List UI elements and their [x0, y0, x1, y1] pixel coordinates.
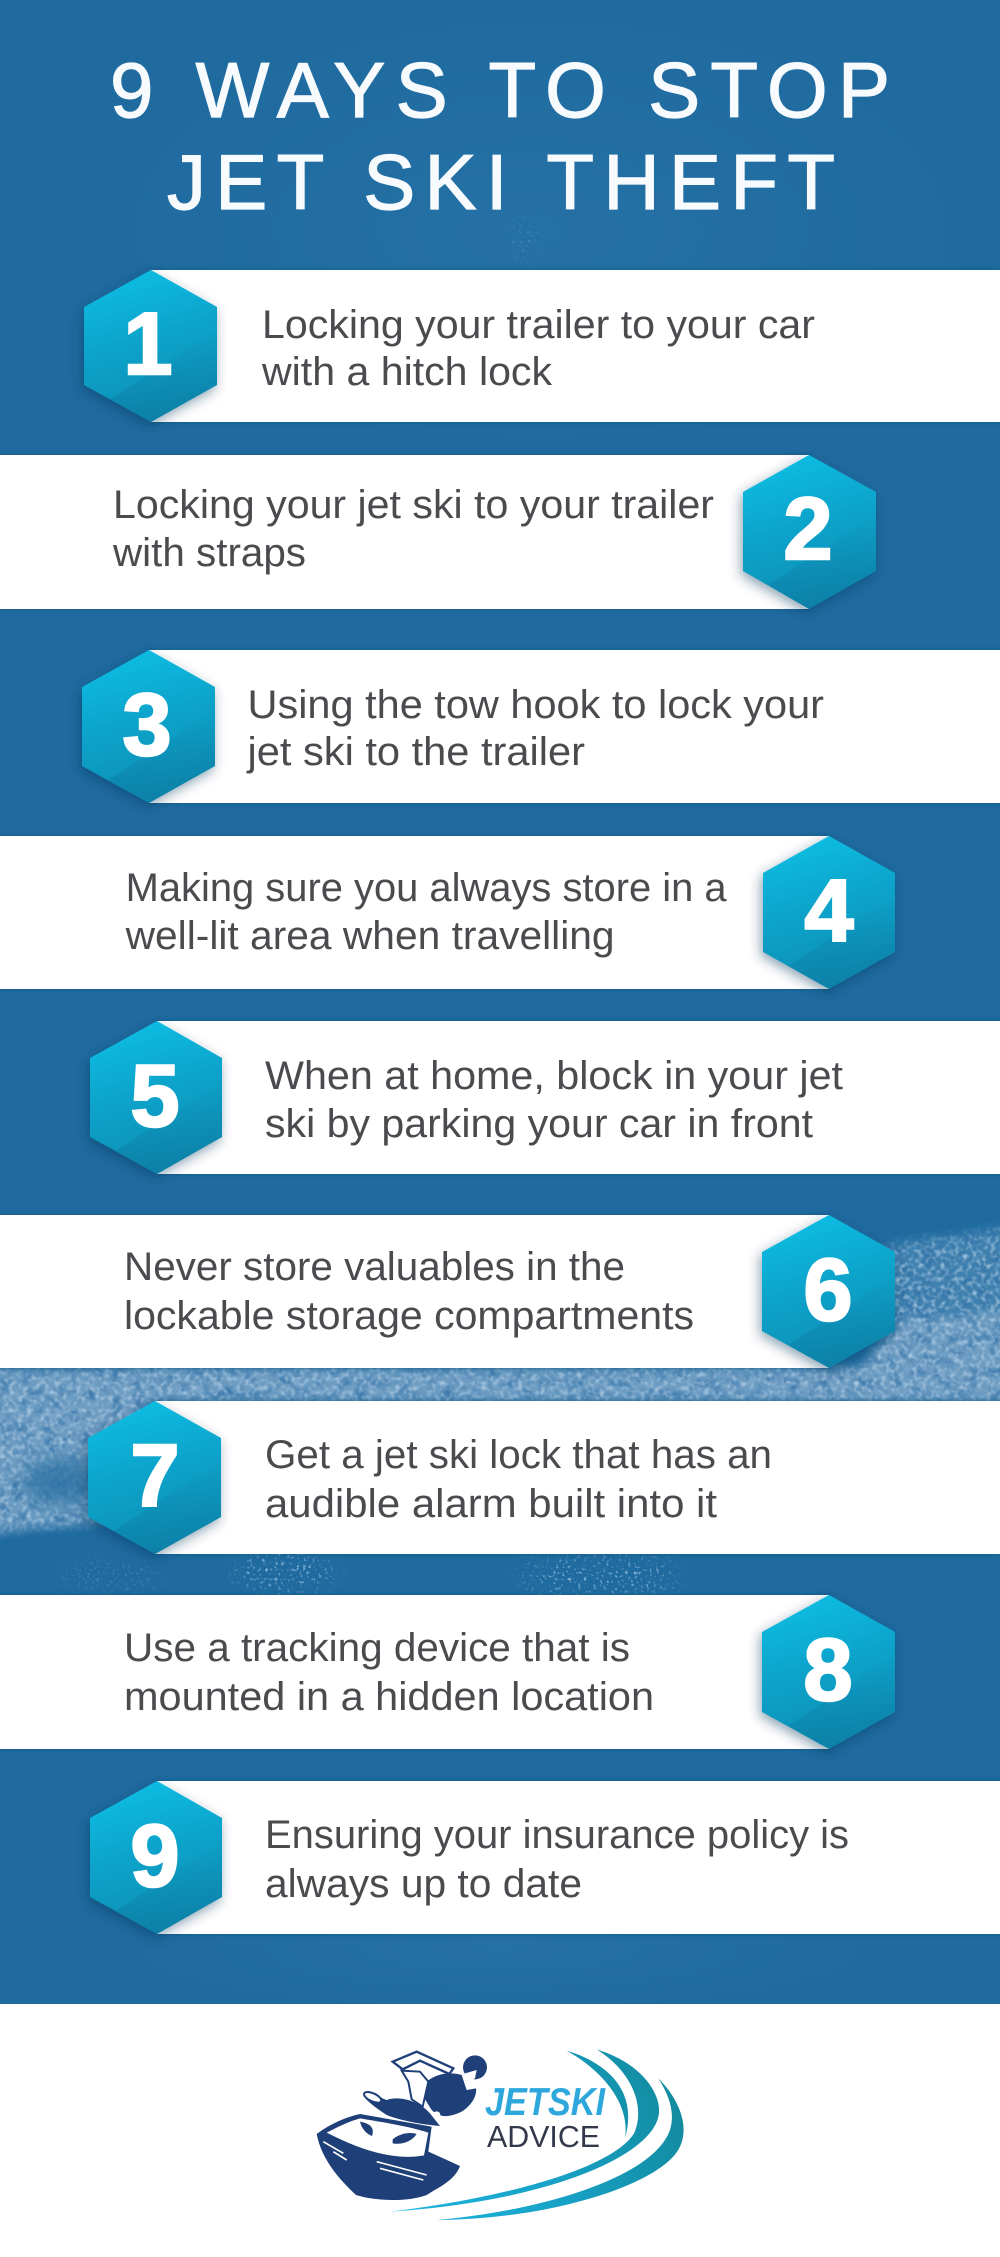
number 6: 6 [804, 1240, 852, 1339]
logo: Jetski Advice [317, 2049, 684, 2220]
text 3 [246, 683, 824, 774]
number 7: 7 [131, 1426, 179, 1525]
step 3 [82, 650, 1000, 803]
text 2: Locking your jet ski to your trailer [113, 483, 714, 527]
number 8: 8 [804, 1620, 852, 1719]
logo wordmark: JETSKI: JETSKI [485, 2081, 606, 2124]
number 4: 4 [805, 861, 854, 960]
text 2: with straps [112, 531, 306, 575]
spray droplets [60, 218, 680, 1594]
band 4 [0, 836, 829, 989]
band 3 [149, 650, 1000, 803]
text 6: Never store valuables in the [124, 1245, 625, 1289]
text 7 [265, 1433, 772, 1526]
text 1: Locking your trailer to your car [262, 303, 815, 347]
text 8 [124, 1626, 654, 1719]
hexagon badge 7 [88, 1401, 221, 1554]
text 3: Using the tow hook to lock your [248, 683, 824, 727]
hexagon badge 3 [82, 650, 215, 803]
text 1: with a hitch lock [261, 350, 553, 394]
text 7: audible alarm built into it [265, 1482, 717, 1526]
band 8 [0, 1595, 829, 1749]
text 2 [112, 483, 714, 575]
number 5: 5 [131, 1046, 179, 1145]
step 8 [0, 1595, 895, 1749]
step 9 [90, 1781, 1000, 1934]
step 1 [84, 270, 1000, 422]
number 1: 1 [124, 294, 172, 393]
number 9: 9 [131, 1806, 179, 1905]
hexagon badge 1 [84, 270, 217, 422]
step 4 [0, 836, 895, 989]
text 7: Get a jet ski lock that has an [265, 1433, 772, 1477]
text 4 [125, 866, 727, 958]
text 8: mounted in a hidden location [124, 1675, 654, 1719]
hexagon badge 8 [762, 1595, 895, 1749]
text 9: always up to date [265, 1862, 582, 1906]
hexagon badge 4 [763, 836, 895, 989]
footer white area [0, 2004, 1000, 2257]
title: JET SKI THEFT [167, 138, 835, 226]
text 3: jet ski to the trailer [246, 730, 585, 774]
band 9 [157, 1781, 1000, 1934]
band 1 [151, 270, 1000, 422]
step 5 [90, 1021, 1000, 1174]
band 7 [155, 1401, 1000, 1554]
logo swooshes [390, 2049, 684, 2220]
step 7 [88, 1401, 1000, 1554]
hexagon badge 6 [762, 1215, 895, 1368]
title: 9 WAYS TO STOP [110, 46, 890, 134]
text 9: Ensuring your insurance policy is [265, 1813, 849, 1857]
title [110, 46, 890, 226]
text 4: Making sure you always store in a [126, 866, 727, 910]
text 1 [261, 303, 815, 394]
step 2 [0, 455, 876, 609]
hexagon badge 5 [90, 1021, 222, 1174]
text 6: lockable storage compartments [124, 1294, 694, 1338]
text 5: When at home, block in your jet [265, 1054, 843, 1098]
band 6 [0, 1215, 829, 1368]
step 6 [0, 1215, 895, 1368]
logo wordmark: ADVICE: ADVICE [487, 2119, 600, 2154]
text 9 [265, 1813, 849, 1906]
sea foam from jet ski wake [0, 1225, 1000, 1534]
hexagon badge 9 [90, 1781, 222, 1934]
number 2: 2 [784, 479, 832, 578]
hexagon badge 2 [743, 455, 876, 609]
dark wave patch [22, 1458, 102, 1506]
logo icon: jet ski rider [317, 2052, 487, 2200]
text 5: ski by parking your car in front [265, 1102, 813, 1146]
number 3: 3 [123, 675, 171, 774]
text 4: well-lit area when travelling [125, 914, 615, 958]
band 2 [0, 455, 809, 609]
text 8: Use a tracking device that is [124, 1626, 630, 1670]
band 5 [157, 1021, 1000, 1174]
text 6 [124, 1245, 694, 1338]
text 5 [265, 1054, 843, 1146]
